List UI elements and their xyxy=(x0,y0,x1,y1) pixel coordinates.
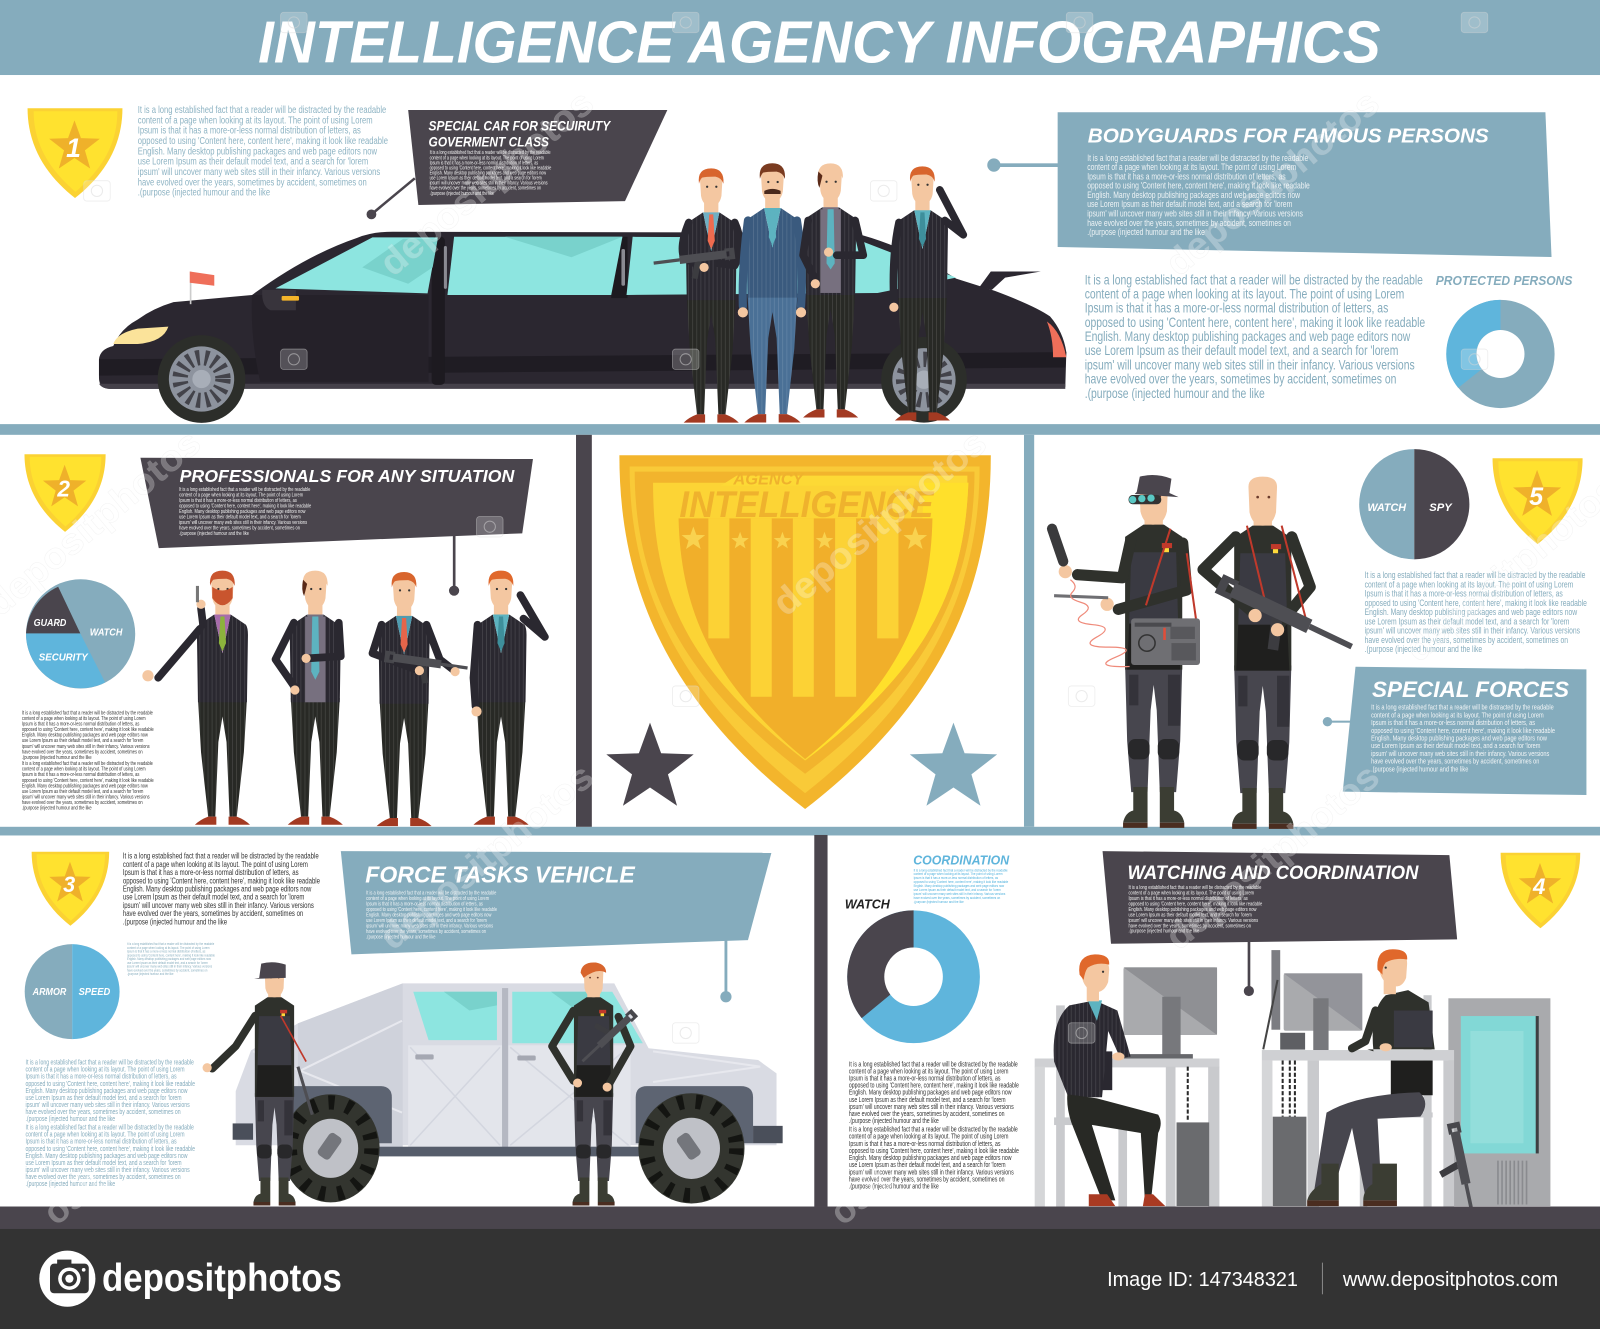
text block: force lower 2: ipsum' will uncover many web sites still in their infancy. Various versions xyxy=(26,1166,190,1174)
text block: special forces upper: It is a long established fact that a reader will be distracted by the readable xyxy=(1365,570,1586,580)
soldier redhead by the truck xyxy=(552,962,638,1206)
rifle leaning on cabinet xyxy=(1430,1121,1478,1218)
text block: force intro: content of a page when looking at its layout. The point of using Lorem xyxy=(123,859,308,869)
text block: car intro: opposed to using 'Content here, content here', making it look like readable xyxy=(138,135,388,146)
base band watermark fragments: osit xyxy=(822,1160,898,1233)
text block: professionals lower 2: It is a long established fact that a reader will be distracted by the readable xyxy=(22,760,153,767)
text block: tiny note: content of a page when looking at its layout. The point of using Lorem xyxy=(127,945,210,950)
pie chart: guard, watch, security: WATCH xyxy=(90,627,123,638)
star blue xyxy=(910,723,997,806)
badge 5: 5 xyxy=(1529,483,1544,511)
text block: professionals lower 2: content of a page when looking at its layout. The point of using Lorem xyxy=(22,766,146,773)
text block: professionals lower 1: content of a page when looking at its layout. The point of using Lorem xyxy=(22,715,146,722)
text block: special forces callout: It is a long established fact that a reader will be distracted by the readable xyxy=(1371,704,1554,712)
protected person in blue suit xyxy=(738,163,806,423)
pie chart: watch and spy: SPY xyxy=(1429,502,1453,514)
text block: watching lower 2: It is a long established fact that a reader will be distracted by the readable xyxy=(849,1126,1018,1134)
text block: special forces callout: Ipsum is that it has a more-or-less normal distribution of letters, as xyxy=(1371,719,1536,727)
text block: force lower 1: use Lorem Ipsum as their default model text, and a search for 'lorem xyxy=(26,1094,182,1102)
shield emblem: AGENCY xyxy=(732,470,806,488)
text block: protected persons: It is a long established fact that a reader will be distracted by the readable xyxy=(1085,272,1423,288)
title band xyxy=(0,0,1600,75)
text block: car intro: Ipsum is that it has a more-or-less normal distribution of letters, as xyxy=(138,125,361,136)
text block: special forces upper: Ipsum is that it has a more-or-less normal distribution of letters, as xyxy=(1365,589,1563,599)
text block: force lower 1: Ipsum is that it has a more-or-less normal distribution of letters, as xyxy=(26,1073,177,1081)
text block: professionals lower 1: English. Many desktop publishing packages and web page editors now xyxy=(22,732,148,739)
text block: force intro: .(purpose (injected humour and the like xyxy=(123,916,227,927)
text block: car callout xyxy=(430,150,552,196)
text block: professionals lower 1: Ipsum is that it has a more-or-less normal distribution of letters, as xyxy=(22,721,140,728)
badge 3: 3 xyxy=(63,872,75,897)
text block: coordination note: use Lorem Ipsum as their default model text, and a search for 'lorem xyxy=(914,888,1001,892)
panel: special forces xyxy=(1052,449,1587,829)
text block: car callout: .(purpose (injected humour and the like xyxy=(430,190,494,196)
text block: professionals lower 2: Ipsum is that it has a more-or-less normal distribution of letters, as xyxy=(22,772,140,779)
text block: professionals callout: ipsum' will uncover many web sites still in their infancy. Various versions xyxy=(179,519,308,526)
text block: force intro: use Lorem Ipsum as their default model text, and a search for 'lorem xyxy=(123,892,304,902)
text block: protected persons xyxy=(1085,272,1425,401)
soldier with cap xyxy=(203,962,312,1206)
heading: watch: WATCH xyxy=(845,896,891,911)
text block: force lower 2: English. Many desktop publishing packages and web page editors now xyxy=(26,1152,188,1160)
text block: watching lower 2: ipsum' will uncover many web sites still in their infancy. Various versions xyxy=(849,1169,1014,1177)
text block: force tasks callout: have evolved over the years, sometimes by accident, sometimes on xyxy=(366,928,486,935)
pie chart: guard, watch, security: GUARD xyxy=(34,618,66,629)
text block: special forces callout: content of a page when looking at its layout. The point of using Lorem xyxy=(1371,712,1544,720)
text block: watching lower 1: content of a page when looking at its layout. The point of using Lorem xyxy=(849,1068,1008,1076)
shield emblem: INTELLIGENCE xyxy=(679,484,935,525)
text block: coordination note: English. Many desktop publishing packages and web page editors now xyxy=(914,884,1005,888)
panel frame: dividers xyxy=(0,424,1600,1207)
text block: watching lower 1: It is a long established fact that a reader will be distracted by the readable xyxy=(849,1061,1018,1069)
text block: protected persons: opposed to using 'Content here, content here', making it look like readable xyxy=(1085,314,1425,330)
text block: watching callout xyxy=(1128,885,1263,935)
text block: force lower 1: content of a page when looking at its layout. The point of using Lorem xyxy=(26,1066,185,1074)
base band watermark fragments xyxy=(35,1160,898,1233)
callout band: special car xyxy=(408,110,667,205)
soldier with rifle xyxy=(1203,477,1356,829)
footer logo wordmark: depositphotos xyxy=(102,1257,342,1300)
badge 1 xyxy=(28,108,122,198)
text block: professionals callout xyxy=(179,486,311,537)
text block: bodyguards callout: content of a page when looking at its layout. The point of using Lorem xyxy=(1087,162,1296,173)
callout band: bodyguards xyxy=(987,112,1552,257)
panel: central agency shield xyxy=(606,455,997,809)
badge 4: 4 xyxy=(1532,874,1545,899)
pie chart: armor and speed: ARMOR xyxy=(32,987,66,998)
text block: watching lower 1: ipsum' will uncover many web sites still in their infancy. Various versions xyxy=(849,1103,1014,1111)
image id: Image ID: 147348321 xyxy=(1107,1269,1298,1291)
badge 2 xyxy=(24,454,106,532)
heading: special car: SPECIAL CAR FOR SECUIRUTY xyxy=(429,119,611,135)
agent with earpiece xyxy=(471,571,545,825)
heading: bodyguards: BODYGUARDS FOR FAMOUS PERSONS xyxy=(1088,126,1489,148)
text block: force lower 2 xyxy=(26,1124,195,1189)
text block: professionals lower 1: have evolved over the years, sometimes by accident, sometimes on xyxy=(22,749,143,756)
text block: watching lower 2: have evolved over the years, sometimes by accident, sometimes on xyxy=(849,1176,1005,1184)
text block: special forces callout xyxy=(1371,704,1555,774)
text block: watching callout: have evolved over the years, sometimes by accident, sometimes on xyxy=(1128,923,1251,930)
connector: watching xyxy=(1244,939,1254,996)
dark base band xyxy=(0,1207,1600,1230)
text block: force tasks callout: .(purpose (injected humour and the like xyxy=(366,934,436,941)
text block: watching lower 2: use Lorem Ipsum as their default model text, and a search for 'lorem xyxy=(849,1161,1006,1169)
soldier with recorder xyxy=(1052,475,1200,828)
heading: watching: WATCHING AND COORDINATION xyxy=(1128,862,1419,884)
text block: force lower 1: have evolved over the years, sometimes by accident, sometimes on xyxy=(26,1108,181,1116)
donut chart: protected persons xyxy=(1446,300,1555,408)
bodyguard with earpiece xyxy=(889,166,963,421)
badge 4 xyxy=(1501,853,1580,928)
text block: special forces upper: English. Many desktop publishing packages and web page editors now xyxy=(1365,607,1577,617)
connector: force tasks xyxy=(720,937,732,1002)
text block: force intro: ipsum' will uncover many web sites still in their infancy. Various versions xyxy=(123,900,314,910)
text block: force lower 1: opposed to using 'Content here, content here', making it look like readable xyxy=(26,1080,195,1088)
text block: watching callout: It is a long established fact that a reader will be distracted by the readable xyxy=(1128,885,1262,891)
donut chart: watch and coordination xyxy=(847,910,980,1043)
depositphotos watermarks: depositphotos xyxy=(372,82,601,284)
text block: coordination note: It is a long established fact that a reader will be distracted by the readable xyxy=(914,868,1008,872)
text block: professionals lower 2: opposed to using 'Content here, content here', making it look like readable xyxy=(22,777,154,784)
text block: bodyguards callout: English. Many desktop publishing packages and web page editors now xyxy=(1087,190,1300,200)
pie chart: watch and spy: WATCH xyxy=(1367,502,1406,514)
text block: car callout: English. Many desktop publishing packages and web page editors now xyxy=(430,170,547,176)
text block: professionals callout: opposed to using 'Content here, content here', making it look like readable xyxy=(179,503,311,510)
text block: watching lower 2: .(purpose (injected humour and the like xyxy=(849,1183,939,1191)
text block: special forces upper: .(purpose (injected humour and the like xyxy=(1365,644,1483,654)
text block: watching lower 1: opposed to using 'Content here, content here', making it look like readable xyxy=(849,1082,1019,1090)
text block: watching lower 1: have evolved over the years, sometimes by accident, sometimes on xyxy=(849,1110,1005,1118)
text block: professionals lower 1: ipsum' will uncover many web sites still in their infancy. Various versions xyxy=(22,743,150,750)
text block: watching lower 1: English. Many desktop publishing packages and web page editors now xyxy=(849,1089,1012,1097)
text block: professionals callout: It is a long established fact that a reader will be distracted by the readable xyxy=(179,486,311,493)
text block: special forces upper: content of a page when looking at its layout. The point of using Lorem xyxy=(1365,579,1573,590)
text block: special forces callout: have evolved over the years, sometimes by accident, sometimes on xyxy=(1371,758,1540,766)
text block: tiny note: .(purpose (injected humour and the like xyxy=(127,972,174,976)
text block: watching callout: opposed to using 'Content here, content here', making it look like readable xyxy=(1128,901,1263,908)
text block: watching lower 2: opposed to using 'Content here, content here', making it look like readable xyxy=(849,1147,1019,1155)
text block: watching lower 1: Ipsum is that it has a more-or-less normal distribution of letters, as xyxy=(849,1075,1000,1083)
text block: special forces upper: ipsum' will uncover many web sites still in their infancy. Various versions xyxy=(1365,626,1580,636)
bodyguard bald xyxy=(803,163,863,417)
text block: bodyguards callout: .(purpose (injected humour and the like xyxy=(1087,227,1205,237)
text block: watching lower 1: use Lorem Ipsum as their default model text, and a search for 'lorem xyxy=(849,1096,1006,1104)
pie chart: guard, watch, security: SECURITY xyxy=(39,653,89,664)
text block: force lower 2: opposed to using 'Content here, content here', making it look like readable xyxy=(26,1145,195,1153)
armored truck xyxy=(233,983,783,1203)
text block: force intro: Ipsum is that it has a more-or-less normal distribution of letters, as xyxy=(123,867,299,877)
agent with radio xyxy=(142,571,250,825)
pie chart: armor and speed xyxy=(25,944,120,1039)
text block: watching lower 2: Ipsum is that it has a more-or-less normal distribution of letters, as xyxy=(849,1140,1000,1148)
text block: force intro xyxy=(123,851,320,927)
connector: professionals xyxy=(449,531,459,596)
text block: special forces callout: English. Many desktop publishing packages and web page editors now xyxy=(1371,735,1547,743)
heading: force tasks: FORCE TASKS VEHICLE xyxy=(365,862,636,888)
text block: professionals lower 1 xyxy=(22,710,154,761)
text block: bodyguards callout: It is a long established fact that a reader will be distracted by the readable xyxy=(1087,153,1309,163)
text block: special forces callout: opposed to using 'Content here, content here', making it look like readable xyxy=(1371,727,1555,735)
callout band: watching xyxy=(1103,851,1457,944)
text block: professionals callout: content of a page when looking at its layout. The point of using Lorem xyxy=(179,492,303,499)
text block: special forces callout: ipsum' will uncover many web sites still in their infancy. Various versions xyxy=(1371,750,1550,758)
badge 1: 1 xyxy=(66,133,81,163)
text block: force tasks callout: ipsum' will uncover many web sites still in their infancy. Various versions xyxy=(366,923,494,930)
text block: force tasks callout: opposed to using 'Content here, content here', making it look like readable xyxy=(366,906,497,913)
footer divider xyxy=(1322,1263,1323,1294)
text block: protected persons: Ipsum is that it has a more-or-less normal distribution of letters, as xyxy=(1085,300,1388,316)
desk with monitor and seated agent xyxy=(1035,954,1219,1207)
text block: special forces callout: .(purpose (injected humour and the like xyxy=(1371,766,1469,774)
text block: car callout: content of a page when looking at its layout. The point of using Lorem xyxy=(430,155,544,160)
text block: watching lower 1: .(purpose (injected humour and the like xyxy=(849,1117,939,1125)
callout band: force tasks xyxy=(341,851,771,954)
depositphotos watermarks: depositphotos xyxy=(1157,82,1387,284)
depositphotos watermarks: depositphotos xyxy=(1157,755,1387,957)
text block: watching callout: .(purpose (injected humour and the like xyxy=(1128,928,1200,935)
text block: force lower 2: Ipsum is that it has a more-or-less normal distribution of letters, as xyxy=(26,1138,177,1146)
shield emblem xyxy=(619,455,991,809)
text block: professionals lower 1: opposed to using 'Content here, content here', making it look like readable xyxy=(22,726,154,733)
text block: protected persons: English. Many desktop publishing packages and web page editors now xyxy=(1085,328,1410,344)
text block: car callout: use Lorem Ipsum as their default model text, and a search for 'lorem xyxy=(430,175,542,181)
text block: coordination note: have evolved over the years, sometimes by accident, sometimes on xyxy=(914,896,1000,900)
text block: professionals lower 1: .(purpose (injected humour and the like xyxy=(22,754,92,761)
text block: professionals lower 2: .(purpose (injected humour and the like xyxy=(22,805,92,812)
text block: force tasks callout: Ipsum is that it has a more-or-less normal distribution of letters, as xyxy=(366,901,483,908)
text block: tiny note xyxy=(127,942,215,976)
text block: car callout: ipsum' will uncover many web sites still in their infancy. Various versions xyxy=(430,180,548,186)
footer bar xyxy=(0,1229,1600,1329)
text block: car intro: ipsum' will uncover many web sites still in their infancy. Various versions xyxy=(138,166,381,177)
text block: special forces upper: use Lorem Ipsum as their default model text, and a search for 'lorem xyxy=(1365,616,1570,627)
text block: watching lower 2 xyxy=(849,1126,1019,1191)
text block: car intro: have evolved over the years, sometimes by accident, sometimes on xyxy=(138,176,367,188)
agent bald with vest xyxy=(276,571,343,825)
text block: car intro: content of a page when looking at its layout. The point of using Lorem xyxy=(138,114,373,126)
text block: watching lower 2: English. Many desktop publishing packages and web page editors now xyxy=(849,1154,1012,1162)
panel: force tasks vehicle xyxy=(25,851,783,1206)
text block: force lower 2: It is a long established fact that a reader will be distracted by the readable xyxy=(26,1124,194,1132)
depositphotos watermarks: depositphotos xyxy=(372,755,601,957)
text block: watching lower 1 xyxy=(849,1061,1019,1125)
text block: coordination note: .(purpose (injected humour and the like xyxy=(914,899,964,904)
text block: coordination note: opposed to using 'Content here, content here', making it look like readable xyxy=(914,880,1008,884)
text block: car callout: opposed to using 'Content here, content here', making it look like readable xyxy=(430,165,552,171)
panel: watching and coordination xyxy=(845,851,1580,1218)
text block: watching callout: ipsum' will uncover many web sites still in their infancy. Various versions xyxy=(1128,917,1259,924)
text block: watching callout: English. Many desktop publishing packages and web page editors now xyxy=(1128,906,1257,913)
heading: professionals: PROFESSIONALS FOR ANY SITUATION xyxy=(180,466,515,486)
text block: protected persons: use Lorem Ipsum as their default model text, and a search for 'lorem xyxy=(1085,343,1398,359)
text block: bodyguards callout: opposed to using 'Content here, content here', making it look like readable xyxy=(1087,181,1310,191)
text block: force lower 1: .(purpose (injected humour and the like xyxy=(26,1115,116,1123)
website: www.depositphotos.com xyxy=(1342,1269,1558,1291)
watermark camera marks xyxy=(84,12,1488,1043)
text block: protected persons: .(purpose (injected humour and the like xyxy=(1085,385,1265,401)
text block: force lower 1: It is a long established fact that a reader will be distracted by the readable xyxy=(26,1059,194,1067)
depositphotos watermarks: depositphotos xyxy=(765,422,994,624)
text block: protected persons: have evolved over the years, sometimes by accident, sometimes on xyxy=(1085,371,1396,387)
text block: tiny note: ipsum' will uncover many web sites still in their infancy. Various versions xyxy=(127,964,212,969)
text block: car callout: Ipsum is that it has a more-or-less normal distribution of letters, as xyxy=(430,160,539,166)
text block: force lower 1: English. Many desktop publishing packages and web page editors now xyxy=(26,1087,188,1095)
footer logo icon xyxy=(39,1251,95,1307)
callout band: professionals xyxy=(140,458,533,548)
connector: car callout xyxy=(367,178,415,219)
base band watermark fragments: osit xyxy=(35,1160,111,1233)
pie chart: guard, watch, security xyxy=(26,579,135,688)
callout band: special forces xyxy=(1323,667,1586,795)
text block: coordination note: content of a page when looking at its layout. The point of using Lorem xyxy=(914,872,1003,876)
text block: force lower 1 xyxy=(26,1059,195,1123)
title: INTELLIGENCE AGENCY INFOGRAPHICS xyxy=(258,8,1381,75)
text block: coordination note: Ipsum is that it has a more-or-less normal distribution of letters, as xyxy=(914,876,998,880)
text block: tiny note: opposed to using 'Content here, content here', making it look like readable xyxy=(127,953,215,958)
text block: tiny note: English. Many desktop publishing packages and web page editors now xyxy=(127,957,212,961)
text block: special forces upper: opposed to using 'Content here, content here', making it look like readable xyxy=(1365,598,1587,608)
text block: special forces upper: have evolved over the years, sometimes by accident, sometimes on xyxy=(1365,635,1568,645)
text block: force tasks callout xyxy=(366,890,497,941)
text block: force tasks callout: use Lorem Ipsum as their default model text, and a search for 'lorem xyxy=(366,917,487,924)
text block: bodyguards callout xyxy=(1087,153,1310,237)
bodyguard with rifle xyxy=(653,168,740,423)
text block: force lower 2: have evolved over the years, sometimes by accident, sometimes on xyxy=(26,1173,181,1181)
text block: professionals lower 2: ipsum' will uncover many web sites still in their infancy. Various versions xyxy=(22,794,150,801)
text block: professionals callout: use Lorem Ipsum as their default model text, and a search for 'lorem xyxy=(179,514,301,521)
text block: car intro: .(purpose (injected humour and the like xyxy=(138,187,270,198)
text block: car callout: have evolved over the years, sometimes by accident, sometimes on xyxy=(430,185,542,191)
text block: tiny note: have evolved over the years, sometimes by accident, sometimes on xyxy=(127,968,208,973)
text block: coordination note: ipsum' will uncover many web sites still in their infancy. Various versions xyxy=(914,892,1006,896)
badge 3 xyxy=(32,852,109,926)
badge 2: 2 xyxy=(56,475,70,502)
text block: car callout: It is a long established fact that a reader will be distracted by the readable xyxy=(430,150,551,155)
text block: force intro: It is a long established fact that a reader will be distracted by the readable xyxy=(123,851,319,861)
text block: bodyguards callout: Ipsum is that it has a more-or-less normal distribution of letters, as xyxy=(1087,172,1286,182)
text block: special forces callout: use Lorem Ipsum as their default model text, and a search for 'lorem xyxy=(1371,743,1541,751)
text block: force intro: have evolved over the years, sometimes by accident, sometimes on xyxy=(123,908,303,918)
text block: tiny note: use Lorem Ipsum as their default model text, and a search for 'lorem xyxy=(127,960,208,965)
text block: force lower 2: .(purpose (injected humour and the like xyxy=(26,1181,116,1189)
text block: watching callout: Ipsum is that it has a more-or-less normal distribution of letters, as xyxy=(1128,895,1248,902)
text block: special forces upper xyxy=(1365,570,1587,654)
text block: professionals lower 2 xyxy=(22,760,154,812)
panel: professionals xyxy=(22,454,545,826)
pie chart: armor and speed: SPEED xyxy=(79,987,110,998)
text block: professionals callout: .(purpose (injected humour and the like xyxy=(179,530,249,537)
text block: force intro: opposed to using 'Content here, content here', making it look like readable xyxy=(123,875,320,886)
text block: car intro: use Lorem Ipsum as their default model text, and a search for 'lorem xyxy=(138,156,368,167)
star dark xyxy=(606,723,694,806)
text block: professionals lower 2: have evolved over the years, sometimes by accident, sometimes on xyxy=(22,800,143,806)
text block: bodyguards callout: ipsum' will uncover many web sites still in their infancy. Various versions xyxy=(1087,209,1303,219)
limousine xyxy=(99,232,1066,423)
text block: force lower 2: content of a page when looking at its layout. The point of using Lorem xyxy=(26,1131,185,1139)
text block: protected persons: ipsum' will uncover many web sites still in their infancy. Various versions xyxy=(1085,357,1415,373)
text block: force tasks callout: English. Many desktop publishing packages and web page editors now xyxy=(366,912,492,919)
text block: car intro: English. Many desktop publishing packages and web page editors now xyxy=(138,145,377,157)
text block: professionals lower 2: use Lorem Ipsum as their default model text, and a search for 'lorem xyxy=(22,788,143,795)
panel: special car and bodyguards xyxy=(28,104,1573,423)
desk with monitor and seated soldier xyxy=(1262,949,1550,1207)
text block: professionals callout: English. Many desktop publishing packages and web page editors now xyxy=(179,508,306,515)
text block: watching callout: use Lorem Ipsum as their default model text, and a search for 'lorem xyxy=(1128,912,1252,919)
text block: force intro: English. Many desktop publishing packages and web page editors now xyxy=(123,883,312,894)
badge 5 xyxy=(1493,458,1583,544)
depositphotos watermarks xyxy=(0,82,1600,957)
text block: watching callout: content of a page when looking at its layout. The point of using Lorem xyxy=(1128,890,1254,897)
agent with rifle xyxy=(372,572,468,826)
text block: protected persons: content of a page when looking at its layout. The point of using Lorem xyxy=(1085,286,1404,302)
text block: professionals lower 2: English. Many desktop publishing packages and web page editors now xyxy=(22,783,148,790)
heading: protected persons: PROTECTED PERSONS xyxy=(1436,273,1573,288)
text block: car intro: It is a long established fact that a reader will be distracted by the readable xyxy=(138,104,386,115)
text block: professionals lower 1: It is a long established fact that a reader will be distracted by the readable xyxy=(22,710,153,717)
text block: force tasks callout: It is a long established fact that a reader will be distracted by the readable xyxy=(366,890,497,897)
text block: professionals callout: have evolved over the years, sometimes by accident, sometimes on xyxy=(179,525,300,532)
pie chart: watch and spy xyxy=(1359,449,1469,559)
text block: bodyguards callout: have evolved over the years, sometimes by accident, sometimes on xyxy=(1087,218,1291,228)
text block: force lower 2: use Lorem Ipsum as their default model text, and a search for 'lorem xyxy=(26,1159,182,1167)
text block: bodyguards callout: use Lorem Ipsum as their default model text, and a search for 'lorem xyxy=(1087,199,1292,210)
text block: watching lower 2: content of a page when looking at its layout. The point of using Lorem xyxy=(849,1133,1008,1141)
text block: car intro xyxy=(138,104,388,198)
text block: professionals lower 1: use Lorem Ipsum as their default model text, and a search for 'lorem xyxy=(22,738,143,745)
heading: special forces: SPECIAL FORCES xyxy=(1372,677,1569,702)
text block: force tasks callout: content of a page when looking at its layout. The point of using Lorem xyxy=(366,895,489,902)
text block: tiny note: It is a long established fact that a reader will be distracted by the readable xyxy=(127,942,214,946)
heading: government class: GOVERMENT CLASS xyxy=(429,135,549,151)
text block: force lower 1: ipsum' will uncover many web sites still in their infancy. Various versions xyxy=(26,1101,190,1109)
heading: coordination: COORDINATION xyxy=(913,852,1010,867)
text block: tiny note: Ipsum is that it has a more-or-less normal distribution of letters, as xyxy=(127,949,206,954)
text block: coordination note xyxy=(914,868,1008,904)
text block: professionals callout: Ipsum is that it has a more-or-less normal distribution of letters, as xyxy=(179,497,297,504)
